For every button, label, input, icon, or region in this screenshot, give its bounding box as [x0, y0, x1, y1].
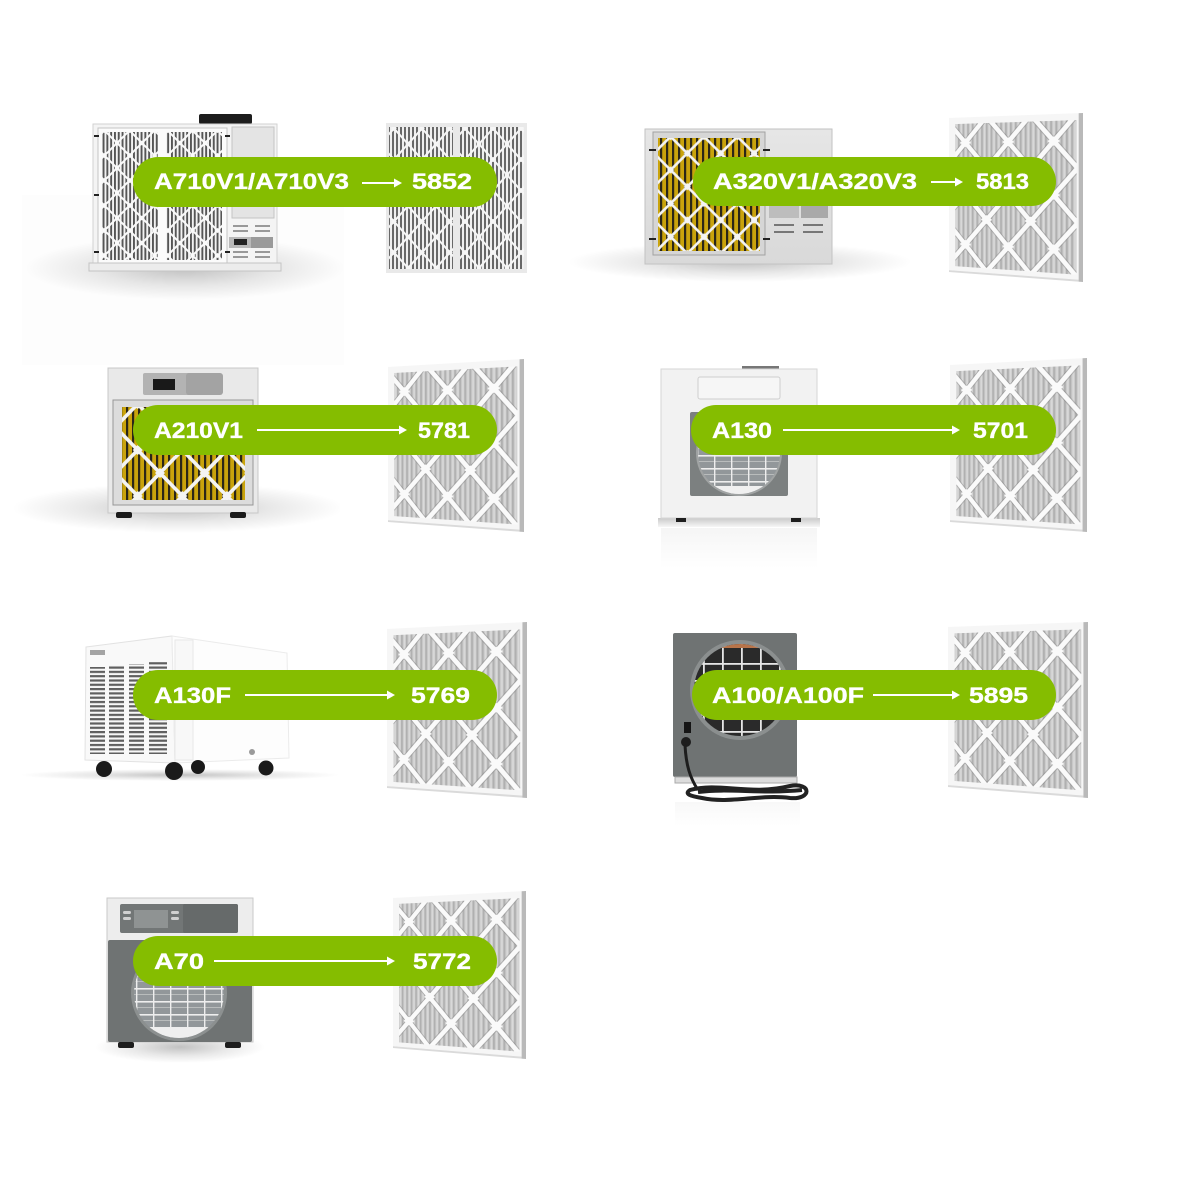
filter: 5813	[949, 113, 1083, 282]
label: A100/A100F to 5895: A100/A100F	[712, 683, 864, 708]
label: A320V1/A320V3 to 5813: A320V1/A320V3	[713, 169, 917, 194]
panel: A130 to filter 5701	[658, 358, 1087, 534]
panel: A320V1/A320V3 to filter 5813	[596, 113, 1083, 282]
filter: 5772	[393, 891, 526, 1059]
unit: A710 dehumidifier	[46, 114, 324, 296]
panel: A70 to filter 5772	[106, 891, 526, 1060]
label: A130F to 5769	[133, 670, 497, 720]
filter: 5701	[950, 358, 1087, 532]
label: A320V1/A320V3 to 5813	[693, 157, 1056, 206]
label: A130 to 5701: 5701	[973, 418, 1028, 443]
filter: 5852 double panel	[386, 123, 527, 273]
unit: A320 dehumidifier	[596, 128, 884, 278]
label: A70 to 5772	[133, 936, 497, 986]
label: A100/A100F to 5895: 5895	[969, 683, 1028, 708]
label: A70 to 5772: 5772	[413, 949, 471, 974]
label: A100/A100F to 5895	[692, 670, 1056, 720]
panel: A130F to filter 5769	[47, 622, 781, 800]
label: A210V1 to 5781: 5781	[418, 418, 470, 443]
panel: A100/A100F to filter 5895	[673, 622, 1088, 802]
unit: A130F dehumidifier	[47, 636, 313, 780]
panel: A710V1/A710V3 to filter 5852	[46, 114, 527, 296]
label: A130 to 5701	[691, 405, 1056, 455]
label: A130F to 5769: A130F	[154, 683, 231, 708]
label: A130 to 5701: A130	[712, 418, 772, 443]
label: A210V1 to 5781: A210V1	[154, 418, 243, 443]
label: A130F to 5769: 5769	[411, 683, 470, 708]
filter: 5781	[388, 359, 524, 532]
unit: A130 dehumidifier	[658, 366, 820, 534]
label: A210V1 to 5781	[133, 405, 497, 455]
label: A710V1/A710V3 to 5852	[133, 157, 497, 207]
label: A710V1/A710V3 to 5852: A710V1/A710V3	[154, 169, 349, 194]
label: A70 to 5772: A70	[154, 949, 204, 974]
filter: 5895	[948, 622, 1088, 798]
unit: A210 dehumidifier	[40, 368, 316, 529]
filter: 5769	[387, 622, 527, 798]
panel: A210V1 to filter 5781	[40, 359, 524, 532]
label: A710V1/A710V3 to 5852: 5852	[412, 169, 472, 194]
unit: A100 dehumidifier	[673, 633, 808, 802]
unit: A70 dehumidifier	[106, 898, 254, 1060]
label: A320V1/A320V3 to 5813: 5813	[976, 169, 1029, 194]
